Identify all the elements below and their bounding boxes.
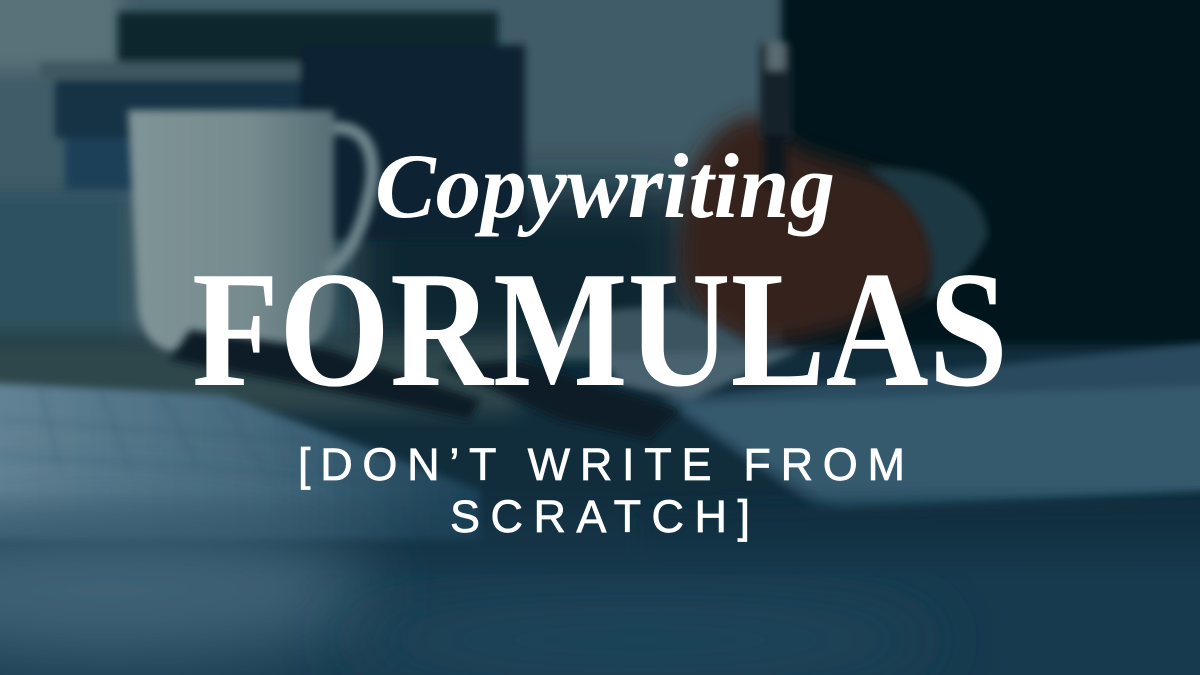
- hand: [679, 115, 944, 342]
- pen: [760, 42, 792, 185]
- desk surface: [0, 338, 520, 413]
- notebook: [545, 308, 1200, 510]
- title script: Copywriting: Copywriting: [375, 135, 835, 237]
- keyboard: [0, 382, 480, 540]
- wall: [0, 0, 790, 340]
- dark panel top right: [782, 0, 1200, 345]
- coffee mug: [128, 110, 372, 352]
- subtitle: [298, 439, 905, 542]
- subtitle: [DON’T WRITE FROM: [298, 439, 905, 490]
- title main: FORMULAS: FORMULAS: [192, 237, 1008, 421]
- dark shadow behind title: [350, 190, 690, 355]
- subtitle: SCRATCH]: [450, 491, 750, 542]
- shadow below notebook: [806, 493, 1176, 514]
- blurred foreground: [0, 490, 1200, 675]
- stacked books: [40, 12, 525, 240]
- shirt cuff: [865, 168, 988, 300]
- black pens on desk: [170, 330, 680, 440]
